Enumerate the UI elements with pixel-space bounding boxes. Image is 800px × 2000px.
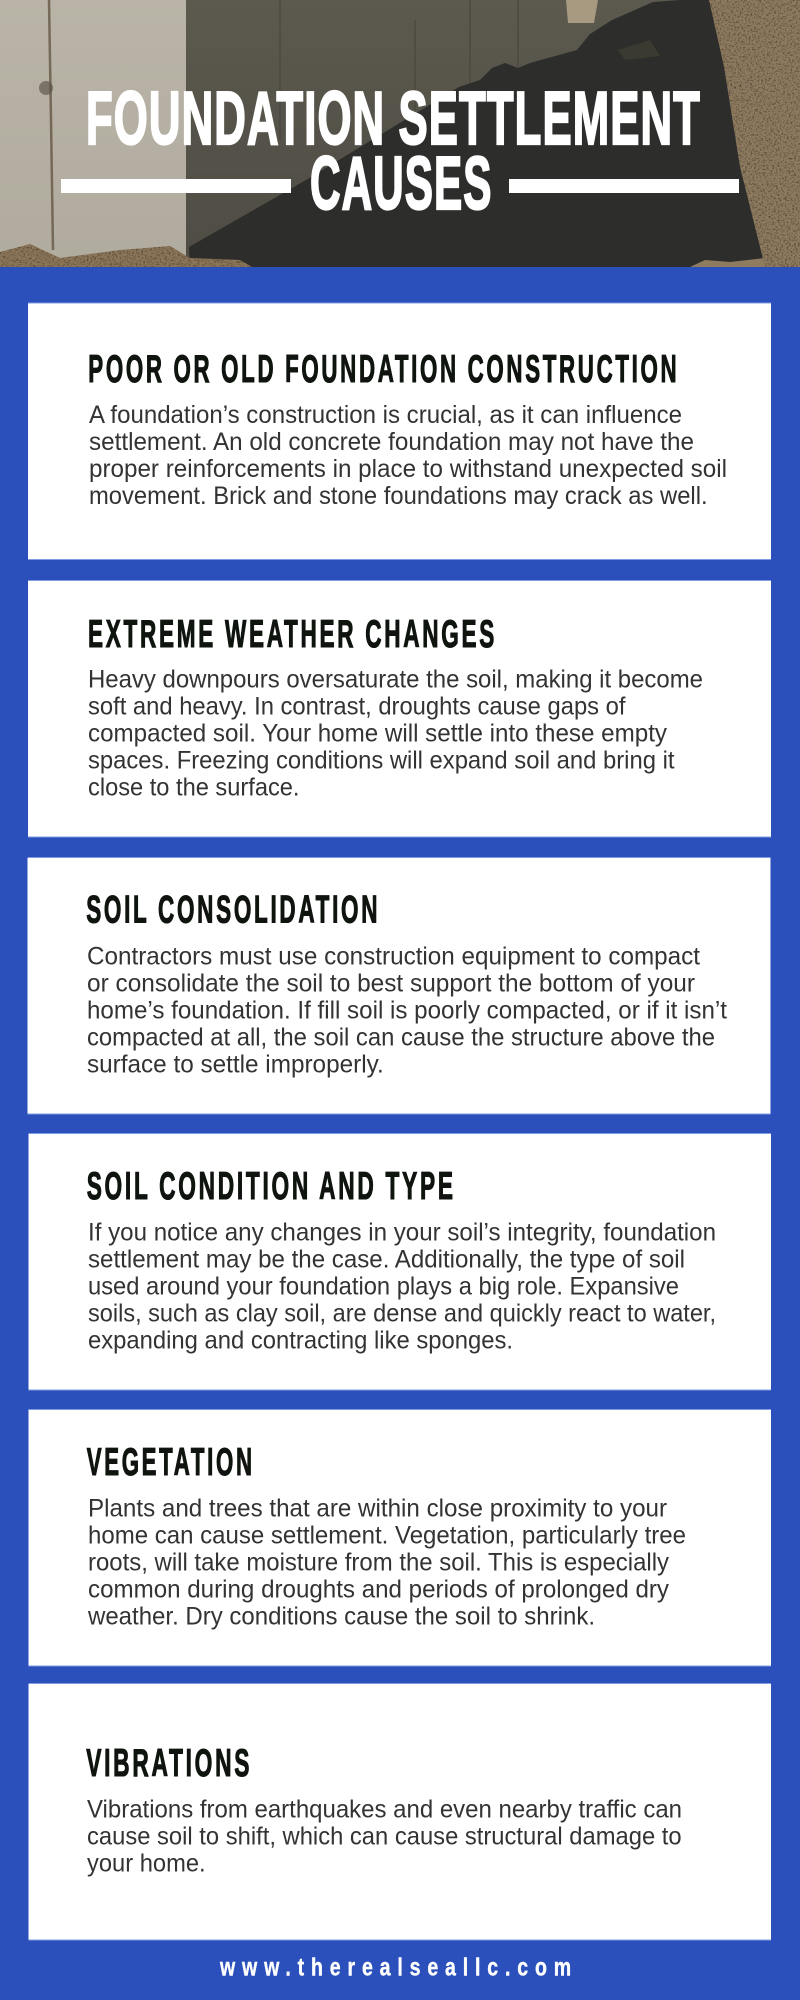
body text: used around your foundation plays a big role. Expansive — [88, 1273, 679, 1301]
body text: common during droughts and periods of prolonged dry — [88, 1576, 669, 1604]
body text: Plants and trees that are within close proximity to your — [88, 1495, 667, 1523]
heading: VEGETATION — [87, 1441, 255, 1484]
body text: settlement may be the case. Additionally, the type of soil — [88, 1246, 685, 1274]
body text: compacted at all, the soil can cause the structure above the — [87, 1024, 715, 1052]
body text: expanding and contracting like sponges. — [88, 1327, 513, 1355]
body text — [88, 665, 703, 801]
body text: home’s foundation. If fill soil is poorly compacted, or if it isn’t — [87, 997, 727, 1025]
body text: A foundation’s construction is crucial, as it can influence — [89, 401, 682, 429]
body text: If you notice any changes in your soil’s integrity, foundation — [88, 1219, 716, 1247]
heading: SOIL CONSOLIDATION — [86, 889, 380, 932]
footer website: www.therealseallc.com — [219, 1954, 578, 1982]
body text — [87, 1495, 686, 1631]
body text: Heavy downpours oversaturate the soil, making it become — [88, 665, 703, 693]
body text: roots, will take moisture from the soil. This is especially — [88, 1549, 669, 1577]
body text — [87, 1795, 682, 1877]
body text: soft and heavy. In contrast, droughts cause gaps of — [88, 692, 626, 720]
body text: weather. Dry conditions cause the soil to shrink. — [87, 1603, 595, 1631]
title rule: left — [61, 179, 291, 193]
title rule: right — [509, 179, 739, 193]
panel: poor or old foundation construction — [28, 303, 771, 560]
panel: vibrations — [28, 1684, 771, 1940]
body text: Contractors must use construction equipment to compact — [87, 943, 700, 971]
body text: home can cause settlement. Vegetation, particularly tree — [88, 1522, 686, 1550]
body text: proper reinforcements in place to withstand unexpected soil — [89, 455, 727, 483]
body text — [87, 943, 727, 1079]
panel: soil consolidation — [28, 858, 770, 1114]
heading: VIBRATIONS — [86, 1742, 252, 1785]
body text: your home. — [87, 1849, 206, 1877]
body text: surface to settle improperly. — [87, 1051, 384, 1079]
body text — [88, 1219, 716, 1355]
body text: compacted soil. Your home will settle into these empty — [88, 719, 667, 747]
body text: soils, such as clay soil, are dense and quickly react to water, — [88, 1300, 716, 1328]
body text: cause soil to shift, which can cause structural damage to — [87, 1822, 682, 1850]
heading: SOIL CONDITION AND TYPE — [87, 1165, 456, 1208]
panel: vegetation — [28, 1410, 771, 1666]
heading: EXTREME WEATHER CHANGES — [88, 613, 497, 656]
panel: soil condition and type — [28, 1134, 771, 1390]
body text: spaces. Freezing conditions will expand soil and bring it — [88, 746, 675, 774]
body text: close to the surface. — [88, 773, 300, 801]
body text: Vibrations from earthquakes and even nearby traffic can — [87, 1795, 682, 1823]
body text — [89, 401, 727, 510]
title — [86, 76, 701, 225]
body text: movement. Brick and stone foundations may crack as well. — [89, 482, 708, 510]
panel: extreme weather changes — [28, 580, 771, 837]
body text: settlement. An old concrete foundation may not have the — [89, 428, 694, 456]
title: CAUSES — [310, 141, 492, 225]
hero photo: foundation wall and soil — [0, 0, 800, 267]
body text: or consolidate the soil to best support the bottom of your — [87, 970, 695, 998]
